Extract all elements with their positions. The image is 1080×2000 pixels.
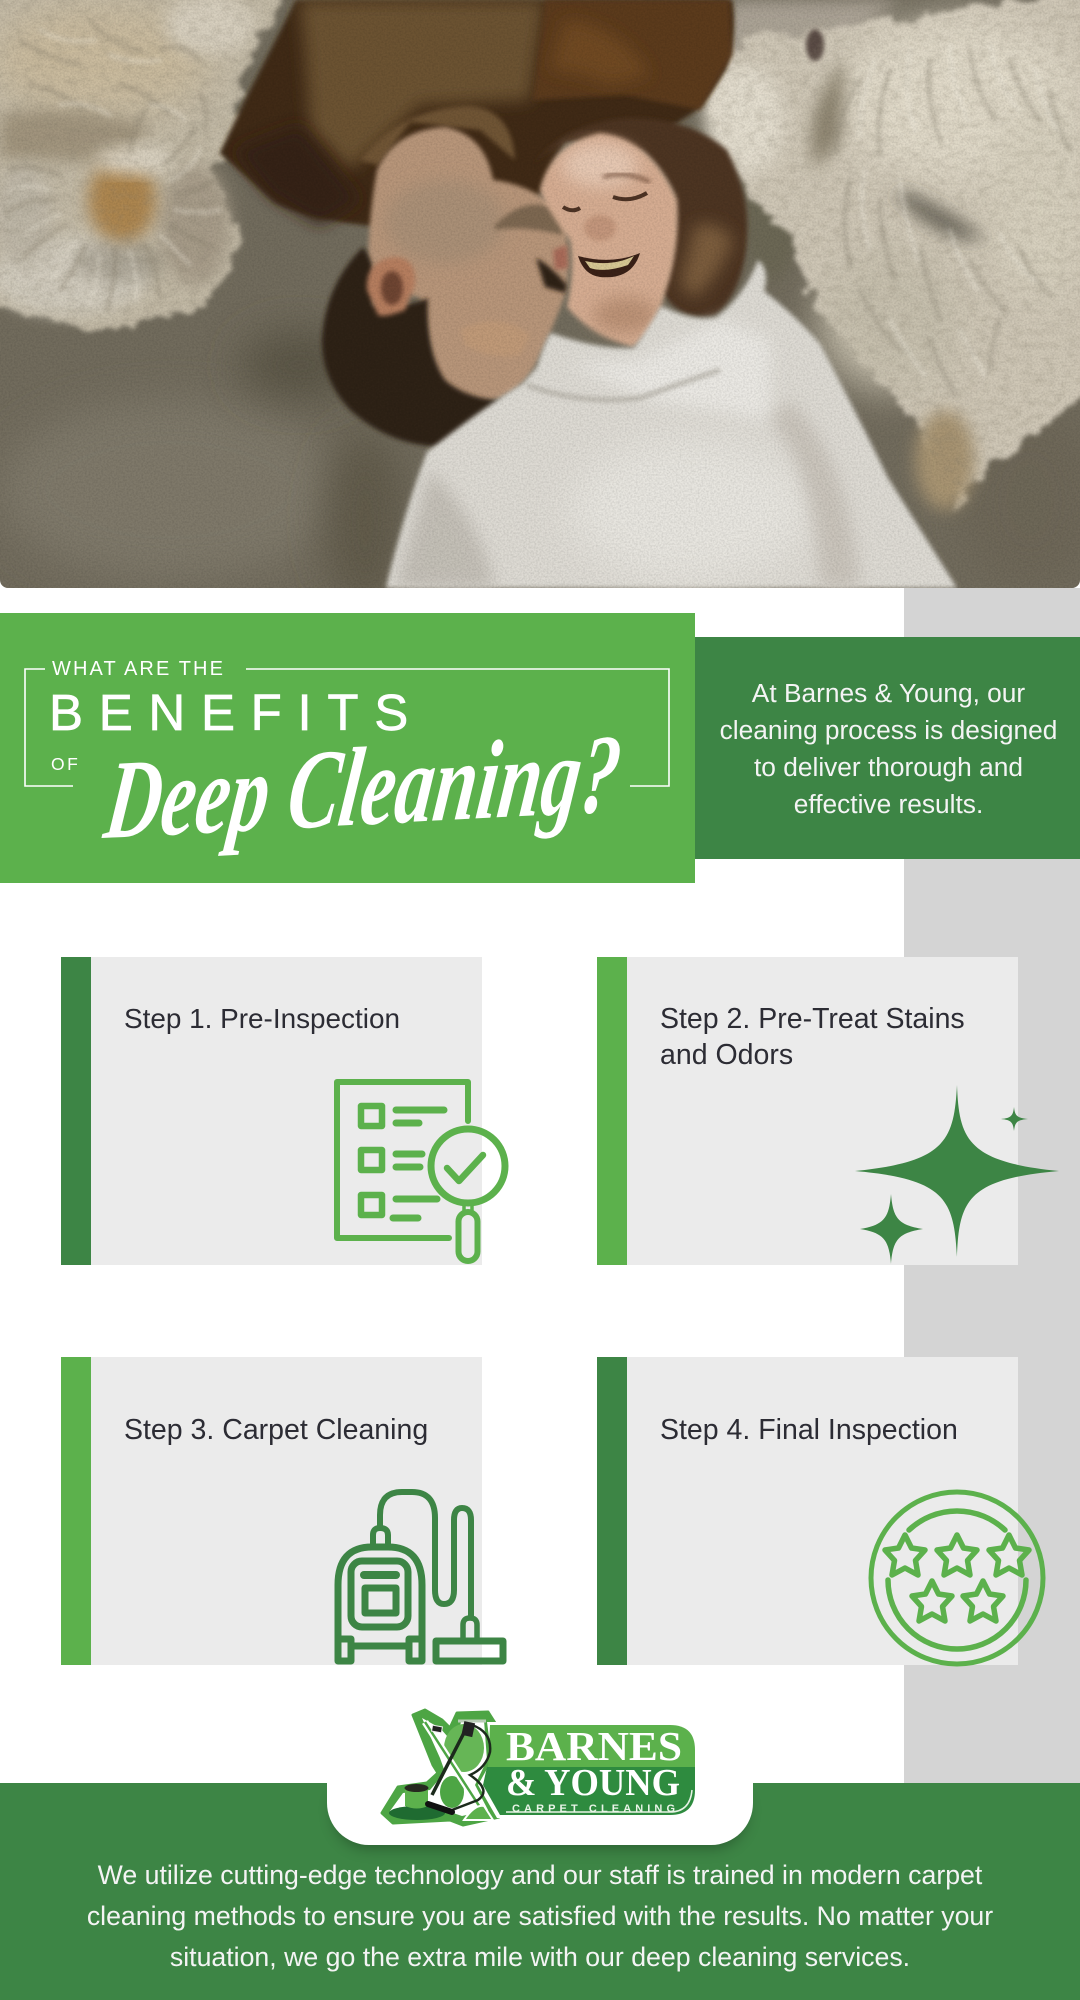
footer band: We utilize cutting-edge technology and our staff is trained in modern carpet — [98, 1860, 982, 1890]
man: ear — [367, 257, 415, 316]
step 2 label: Step 2. Pre-Treat Stains — [660, 1003, 965, 1035]
logo badge — [478, 1722, 698, 1818]
fur strand texture — [0, 0, 1080, 478]
title panel — [0, 613, 695, 883]
intro panel: to deliver thorough and — [754, 752, 1023, 782]
left dog — [0, 0, 296, 333]
heading: benefits: BENEFITS — [49, 684, 424, 741]
step 4 card — [597, 1357, 1018, 1665]
logo mark: green outline — [382, 1710, 698, 1825]
footer band: situation, we go the extra mile with our deep cleaning services. — [170, 1942, 910, 1972]
nozzle — [464, 1806, 493, 1820]
icon: vacuum cleaner — [338, 1492, 503, 1661]
photo grain — [0, 0, 1080, 588]
logo mark: green outline: CARPET CLEANING — [512, 1803, 675, 1815]
floor machine — [389, 1806, 445, 1820]
step 1 label: Step 1. Pre-Inspection — [124, 1003, 400, 1034]
label: of: OF — [51, 754, 80, 774]
logo card — [327, 1783, 753, 1845]
logo text: BARNES — [506, 1723, 682, 1769]
step 2 card — [597, 957, 1018, 1265]
man: head and hair — [322, 127, 568, 447]
hero photo: couple and dogs on carpet — [0, 0, 1080, 588]
step 1 card — [61, 957, 482, 1265]
grey side column — [904, 588, 1080, 1783]
title frame — [25, 669, 669, 786]
logo mark: green outline: & YOUNG — [506, 1762, 680, 1804]
intro panel — [695, 637, 1080, 859]
carpet — [0, 0, 1080, 610]
step 2 label — [660, 1003, 965, 1071]
step 4 label: Step 4. Final Inspection — [660, 1414, 958, 1446]
man: brown shirt — [220, 0, 734, 226]
vacuum wand strokes — [425, 1722, 485, 1815]
logo: Barnes & Young Carpet Cleaning — [380, 1708, 695, 1826]
icon: five star rating — [871, 1492, 1043, 1664]
woman: hair — [533, 118, 747, 316]
eyebrow: what are the: WHAT ARE THE — [52, 658, 225, 680]
step 3 label: Step 3. Carpet Cleaning — [124, 1414, 428, 1446]
right dog fur strands — [835, 50, 1070, 395]
icon: sparkles — [855, 1085, 1059, 1264]
woman: face — [540, 133, 678, 347]
intro panel: cleaning process is designed — [720, 715, 1057, 745]
intro panel: effective results. — [794, 789, 983, 819]
footer band: cleaning methods to ensure you are satisfied with the results. No matter your — [87, 1901, 993, 1931]
icon: checklist with magnifier — [337, 1082, 505, 1261]
left dog fur strands — [7, 20, 220, 310]
script heading: deep cleaning: Deep Cleaning? — [98, 711, 628, 863]
footer band — [0, 1783, 1080, 2000]
step 3 card — [61, 1357, 482, 1665]
intro panel: At Barnes & Young, our — [752, 678, 1025, 708]
step 2 label: and Odors — [660, 1039, 793, 1071]
right dog — [705, 0, 1080, 510]
woman: white hoodie — [386, 260, 957, 588]
